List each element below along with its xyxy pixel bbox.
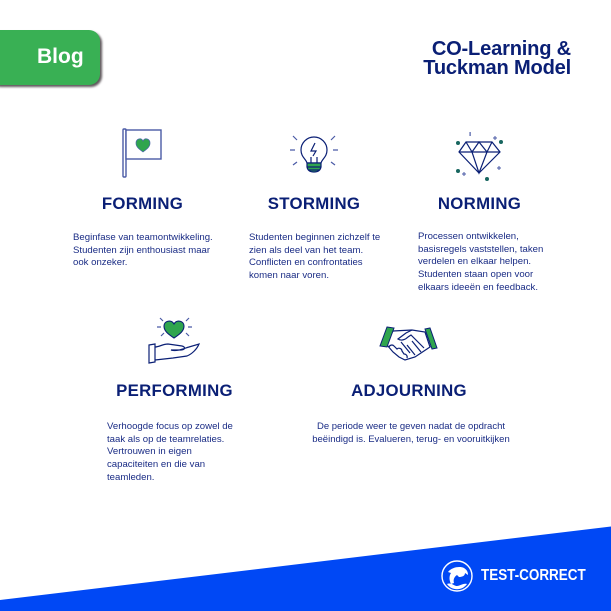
text: norming [418,231,543,293]
text: forming [73,232,213,268]
icon: hand with heart [148,318,200,364]
icon: diamond [456,132,503,181]
title: Tuckman Model [423,57,571,79]
text: performing: Verhoogde focus op zowel de [107,421,233,432]
text: adjourning: beëindigd is. Evalueren, terug- en vooruitkijken [312,434,510,445]
text: forming: Studenten zijn enthousiast maar [73,245,210,256]
icon: handshake [379,326,438,361]
text: storming: Studenten beginnen zichzelf te [249,232,380,243]
text: performing [107,421,233,483]
text: adjourning: De periode weer te geven nadat de opdracht [317,420,505,432]
heading: norming: NORMING [438,194,521,213]
title: CO-Learning & [432,38,571,60]
icon: flag with heart [122,128,162,178]
icon: dolphin badge [441,560,473,592]
panel: adjourning [312,326,510,445]
text: performing: capaciteiten en die van [107,459,205,470]
text: forming: ook onzeker. [73,257,127,268]
panel: storming [249,136,380,281]
panel: norming [418,132,543,293]
blog tab [0,30,100,85]
heading: forming: FORMING [102,194,183,213]
text: norming: verdelen en elkaar helpen. [418,256,531,267]
text: norming: basisregels vaststellen, taken [418,244,543,255]
text: forming: Beginfase van teamontwikkeling. [73,232,213,243]
heading: storming: STORMING [268,194,360,213]
logo wordmark: TEST-CORRECT [481,567,586,584]
heading: performing: PERFORMING [116,381,233,400]
title [423,38,571,79]
icon: light bulb [290,136,338,173]
text: adjourning [312,420,510,445]
text: performing: Vertrouwen in eigen [107,446,192,457]
heading: adjourning: ADJOURNING [351,381,467,400]
panel: forming [73,128,213,268]
blog tab label: Blog [37,45,84,68]
text: storming: komen naar voren. [249,270,329,281]
footer banner [0,526,611,611]
text: storming [249,232,380,281]
text: storming: zien als deel van het team. [249,245,363,256]
text: norming: elkaars ideeën en feedback. [418,282,538,293]
text: norming: Studenten staan open voor [418,269,533,280]
text: performing: teamleden. [107,472,154,483]
text: norming: Processen ontwikkelen, [418,231,519,242]
logo: test-correct [441,560,586,592]
panel: performing [107,318,233,483]
text: storming: Conflicten en confrontaties [249,257,363,268]
text: performing: taak als op de teamrelaties. [107,434,224,445]
